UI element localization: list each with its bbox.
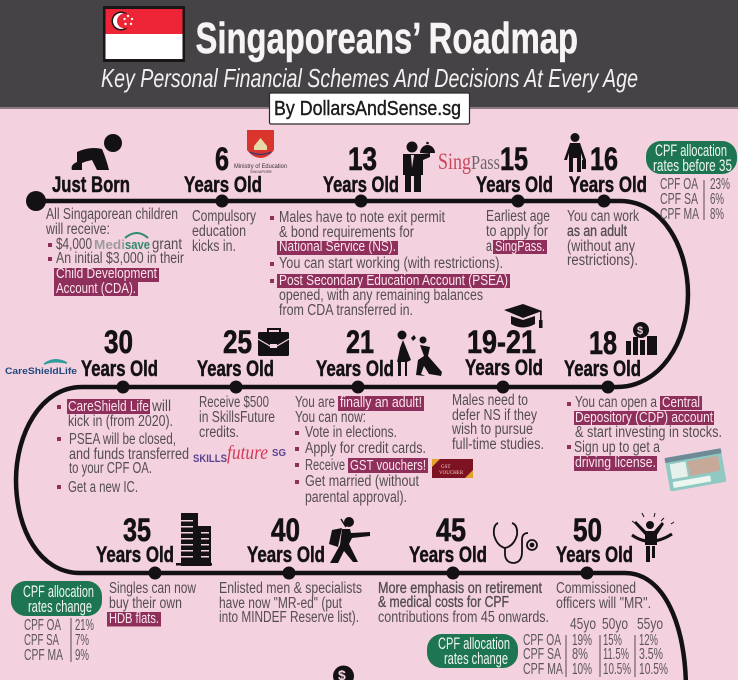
text: commissioned officers bbox=[556, 580, 651, 612]
text: HDB flats for singles: Singles can now bbox=[109, 580, 197, 597]
stage: 6 years old bbox=[184, 130, 287, 255]
stage: 40 years old bbox=[219, 512, 370, 626]
heading: 13 years old: 13 bbox=[348, 141, 377, 177]
text: defer national service: Males need to bbox=[452, 392, 528, 409]
callout: CPF rates at 35: 7% bbox=[75, 632, 89, 649]
text: work as an adult: You can work bbox=[567, 208, 639, 225]
text: national service and PSEA: National Service (NS). bbox=[279, 238, 396, 255]
text: national service and PSEA: from CDA transferred in. bbox=[279, 302, 413, 319]
stage: 35 years old bbox=[96, 512, 212, 627]
text: retirement and medical costs: & medical costs for CPF bbox=[378, 594, 509, 611]
heading: 6 years old bbox=[184, 141, 262, 197]
heading: 18 years old bbox=[564, 325, 641, 381]
icon: dollar coin at bottom bbox=[333, 666, 354, 680]
table: CPF rates by age: 15% bbox=[603, 632, 622, 649]
text: retirement and medical costs: contributions from 45 onwards. bbox=[378, 609, 549, 626]
heading: 30 years old: 30 bbox=[104, 324, 133, 360]
stage: 25 years old bbox=[193, 324, 289, 465]
text: careshield and PSEA: PSEA will be closed, bbox=[69, 431, 176, 448]
heading: 18 years old: 18 bbox=[589, 325, 617, 361]
callout: CPF rates at 35: 21% bbox=[75, 617, 94, 634]
text: national service and PSEA: You can start working (with restrictions). bbox=[279, 255, 503, 272]
heading: 15 years old: Years Old bbox=[476, 172, 553, 197]
text: retirement and medical costs: More emphasis on retirement bbox=[378, 580, 543, 597]
icon: GST voucher card: GST bbox=[441, 465, 450, 470]
callout: CPF rates from 45 bbox=[427, 634, 518, 668]
stage: 18 years old bbox=[564, 322, 727, 492]
text: HDB flats for singles: buy their own bbox=[109, 595, 182, 612]
table: CPF rates by age: 19% bbox=[572, 632, 592, 649]
stage: 13 years old bbox=[270, 141, 510, 319]
text: finally an adult: Get married (without bbox=[305, 473, 420, 490]
callout: CPF rates from 45: rates change bbox=[444, 649, 508, 668]
text: CDP and driving license bbox=[567, 394, 722, 471]
text: finally an adult: parental approval). bbox=[305, 489, 407, 506]
text: skillsfuture credits: in SkillsFuture bbox=[199, 409, 275, 426]
stage: 21 years old bbox=[295, 324, 473, 506]
icon: GST voucher card: VOUCHER bbox=[439, 471, 464, 476]
stage: just born bbox=[45, 134, 184, 297]
text: singpass eligibility: to apply for bbox=[486, 223, 548, 240]
text: enlisted men MR bbox=[219, 580, 362, 626]
callout: CPF rates at 35 bbox=[11, 581, 102, 664]
text: finally an adult: finally an adult! bbox=[340, 394, 422, 411]
heading: 35 years old: Years Old bbox=[96, 542, 174, 567]
text: just born details: will receive: bbox=[45, 221, 110, 238]
heading: 50 years old: Years Old bbox=[556, 542, 633, 567]
text: just born details: $4,000 bbox=[56, 236, 92, 253]
text: enlisted men MR: Enlisted men & specialists bbox=[219, 580, 362, 597]
text: singpass eligibility: a bbox=[486, 238, 492, 255]
heading: 35 years old: 35 bbox=[123, 512, 151, 548]
callout: CPF rates at 35: 9% bbox=[75, 647, 89, 664]
icon: Ministry of Education crest: Ministry of Education bbox=[234, 163, 287, 170]
logo: SkillsFuture SG: SG bbox=[272, 448, 286, 459]
logo: SingPass bbox=[438, 149, 500, 174]
heading: 40 years old: Years Old bbox=[247, 542, 325, 567]
icon: waiter with cloche bbox=[403, 142, 435, 192]
text: compulsory education: kicks in. bbox=[192, 238, 236, 255]
text: skillsfuture credits bbox=[199, 394, 275, 441]
text: national service and PSEA: Post Secondary Education Account (PSEA) bbox=[279, 272, 508, 289]
callout: CPF rates from 45: CPF allocation bbox=[438, 634, 510, 653]
text: compulsory education: Compulsory bbox=[192, 208, 256, 225]
icon: GST voucher card bbox=[432, 459, 473, 478]
text: singpass eligibility: Earliest age bbox=[486, 208, 550, 225]
byline box bbox=[270, 93, 470, 124]
table: CPF rates by age: CPF MA bbox=[523, 661, 563, 678]
table: CPF rates by age: 12% bbox=[639, 632, 658, 649]
heading: 19-21 years old: 19-21 bbox=[467, 324, 536, 360]
heading: 21 years old: Years Old bbox=[316, 356, 394, 381]
text: just born details: Medi bbox=[94, 237, 125, 252]
text: defer national service bbox=[451, 392, 544, 453]
icon: couple bbox=[397, 330, 442, 376]
text: finally an adult: GST vouchers! bbox=[350, 457, 426, 474]
text: work as an adult: as an adult bbox=[567, 223, 628, 240]
callout: CPF rates before 35 bbox=[646, 141, 737, 223]
stage: 45 years old bbox=[378, 512, 549, 626]
heading: 45 years old bbox=[409, 512, 487, 567]
heading: 35 years old bbox=[96, 512, 174, 567]
text: enlisted men MR: into MINDEF Reserve list). bbox=[219, 609, 359, 626]
heading: 21 years old bbox=[316, 324, 394, 381]
callout: CPF rates before 35: 6% bbox=[710, 191, 724, 208]
heading: 6 years old: 6 bbox=[215, 141, 229, 177]
heading: 40 years old bbox=[247, 512, 325, 567]
text: CDP and driving license: Central bbox=[662, 394, 700, 411]
logo: SingPass: Pass bbox=[471, 152, 500, 174]
callout: CPF rates before 35: CPF OA bbox=[660, 176, 698, 193]
icon: coin and bars: $ bbox=[637, 325, 643, 337]
callout: CPF rates before 35: CPF SA bbox=[660, 191, 698, 208]
text: careshield and PSEA: and funds transferred bbox=[69, 446, 189, 463]
stage: 19-21 years old bbox=[451, 304, 544, 453]
text: just born details: All Singaporean children bbox=[46, 206, 178, 223]
heading: 25 years old: Years Old bbox=[197, 356, 274, 381]
table: CPF rates by age: 3.5% bbox=[639, 646, 663, 663]
icon: HDB buildings bbox=[176, 513, 212, 566]
text: skillsfuture credits: Receive $500 bbox=[199, 394, 269, 411]
icon: soldier bbox=[329, 517, 370, 563]
text: singpass eligibility bbox=[486, 208, 550, 255]
heading: 45 years old: Years Old bbox=[409, 542, 487, 567]
text: commissioned officers: Commissioned bbox=[556, 580, 636, 597]
heading: 6 years old: Years Old bbox=[184, 172, 262, 197]
heading: 16 years old: 16 bbox=[590, 141, 618, 177]
stage: 15 years old bbox=[438, 141, 553, 255]
heading: 15 years old: 15 bbox=[500, 141, 528, 177]
callout: CPF rates at 35: rates change bbox=[28, 597, 92, 616]
heading: 25 years old: 25 bbox=[223, 324, 252, 360]
text: defer national service: full-time studies. bbox=[452, 436, 544, 453]
text: compulsory education bbox=[192, 208, 256, 255]
icon: Ministry of Education crest bbox=[234, 130, 287, 174]
text: finally an adult: You can now: bbox=[295, 409, 366, 426]
text: finally an adult: Apply for credit cards. bbox=[305, 440, 426, 457]
callout: CPF rates at 35: CPF OA bbox=[24, 617, 61, 634]
stage: 30 years old bbox=[5, 324, 189, 496]
text: national service and PSEA bbox=[270, 209, 510, 319]
icon: businessman bbox=[564, 133, 586, 172]
heading: 18 years old: Years Old bbox=[564, 356, 641, 381]
callout: CPF rates at 35: CPF MA bbox=[24, 647, 63, 664]
stage: 16 years old bbox=[564, 133, 647, 269]
text: careshield and PSEA: Get a new IC. bbox=[68, 479, 138, 496]
table: CPF rates by age: CPF OA bbox=[523, 632, 561, 649]
text: work as an adult: (without any bbox=[567, 238, 635, 255]
callout: CPF rates at 35: CPF allocation bbox=[23, 582, 94, 601]
table: CPF rates by age: 8% bbox=[572, 646, 588, 663]
text: CDP and driving license: You can open a bbox=[575, 394, 657, 411]
heading: 30 years old: Years Old bbox=[81, 356, 158, 381]
heading: 13 years old bbox=[323, 141, 399, 197]
heading: 21 years old: 21 bbox=[346, 324, 374, 360]
text: just born details bbox=[45, 206, 184, 297]
heading: 30 years old bbox=[81, 324, 158, 381]
callout: CPF rates before 35: 8% bbox=[710, 206, 724, 223]
table: CPF rates by age: 10% bbox=[572, 661, 592, 678]
text: CDP and driving license: Sign up to get a bbox=[574, 439, 660, 456]
text: singpass eligibility: SingPass. bbox=[495, 238, 545, 255]
logo: CareShield Life bbox=[5, 360, 77, 377]
text: careshield and PSEA: kick in (from 2020). bbox=[68, 413, 173, 430]
icon: crawling baby bbox=[72, 134, 122, 170]
byline box: By DollarsAndSense.sg bbox=[274, 98, 461, 120]
heading: 50 years old bbox=[556, 512, 633, 567]
logo: CareShield Life: CareShieldLife bbox=[5, 366, 77, 377]
heading: 50 years old: 50 bbox=[573, 512, 602, 548]
heading: 16 years old bbox=[569, 141, 647, 197]
icon: winner crossing finish line bbox=[632, 513, 674, 562]
text: just born details: An initial $3,000 in their bbox=[56, 250, 184, 267]
text: HDB flats for singles: HDB flats. bbox=[109, 610, 159, 627]
table: CPF rates by age: 45yo bbox=[570, 616, 596, 633]
icon: graduation cap bbox=[504, 304, 542, 328]
text: finally an adult: Vote in elections. bbox=[305, 424, 397, 441]
text: national service and PSEA: & bond requirements for bbox=[279, 224, 414, 241]
logo: SkillsFuture SG bbox=[193, 442, 286, 465]
logo: SingPass: Sing bbox=[438, 149, 471, 174]
heading: 13 years old: Years Old bbox=[323, 172, 399, 197]
logo: SkillsFuture SG: future bbox=[227, 442, 268, 464]
table: CPF rates by age: 10.5% bbox=[639, 661, 668, 678]
text: work as an adult: restrictions). bbox=[567, 252, 638, 269]
icon: briefcase bbox=[258, 329, 289, 356]
heading: just born: Just Born bbox=[52, 172, 130, 197]
icon: driving license card bbox=[664, 448, 727, 492]
text: careshield and PSEA: to your CPF OA. bbox=[69, 460, 152, 477]
text: enlisted men MR: have now "MR-ed" (put bbox=[219, 595, 343, 612]
text: skillsfuture credits: credits. bbox=[199, 424, 239, 441]
text: defer national service: defer NS if they bbox=[452, 407, 537, 424]
text: retirement and medical costs bbox=[378, 580, 549, 626]
text: finally an adult bbox=[295, 394, 428, 506]
text: national service and PSEA: Males have to note exit permit bbox=[279, 209, 446, 226]
text: compulsory education: education bbox=[192, 223, 246, 240]
text: commissioned officers: officers will "MR". bbox=[556, 595, 651, 612]
text: just born details: grant bbox=[152, 236, 183, 253]
heading: 19-21 years old bbox=[465, 324, 543, 380]
callout: CPF rates before 35: CPF MA bbox=[660, 206, 699, 223]
text: careshield and PSEA: will bbox=[151, 398, 171, 415]
icon: stethoscope bbox=[494, 523, 537, 563]
text: national service and PSEA: opened, with any remaining balances bbox=[279, 287, 483, 304]
callout: CPF rates at 35: CPF SA bbox=[24, 632, 59, 649]
logo: SkillsFuture SG: SKILLS bbox=[193, 453, 227, 465]
title: Singaporeans’ Roadmap bbox=[196, 14, 578, 63]
stage: 50 years old bbox=[556, 512, 674, 612]
heading: 15 years old bbox=[476, 141, 553, 197]
heading: 40 years old: 40 bbox=[271, 512, 300, 548]
table: CPF rates by age: 10.5% bbox=[603, 661, 631, 678]
text: finally an adult: Receive bbox=[305, 457, 345, 474]
text: CDP and driving license: driving license. bbox=[575, 454, 656, 471]
table: CPF rates by age bbox=[523, 616, 668, 678]
text: finally an adult: You are bbox=[295, 394, 335, 411]
heading: 45 years old: 45 bbox=[436, 512, 466, 548]
table: CPF rates by age: 55yo bbox=[637, 616, 663, 633]
text: careshield and PSEA bbox=[57, 398, 189, 496]
table: CPF rates by age: CPF SA bbox=[523, 646, 561, 663]
table: CPF rates by age: 11.5% bbox=[603, 646, 629, 663]
text: just born details: Account (CDA). bbox=[56, 280, 136, 297]
text: just born details: save bbox=[125, 237, 150, 252]
text: just born details: Child Development bbox=[56, 265, 158, 282]
heading: 16 years old: Years Old bbox=[569, 172, 647, 197]
text: defer national service: wish to pursue bbox=[451, 421, 533, 438]
timeline path bbox=[16, 191, 688, 680]
icon: Ministry of Education crest: SINGAPORE bbox=[250, 169, 272, 174]
text: work as an adult bbox=[567, 208, 639, 269]
text: careshield and PSEA: CareShield Life bbox=[68, 398, 149, 415]
table: CPF rates by age: 50yo bbox=[602, 616, 628, 633]
heading: 25 years old bbox=[197, 324, 274, 381]
icon: coin and bars bbox=[626, 322, 657, 355]
text: HDB flats for singles bbox=[107, 580, 197, 627]
icon: Singapore flag bbox=[103, 6, 185, 62]
header banner bbox=[0, 0, 738, 124]
heading: 19-21 years old: Years Old bbox=[465, 355, 543, 380]
